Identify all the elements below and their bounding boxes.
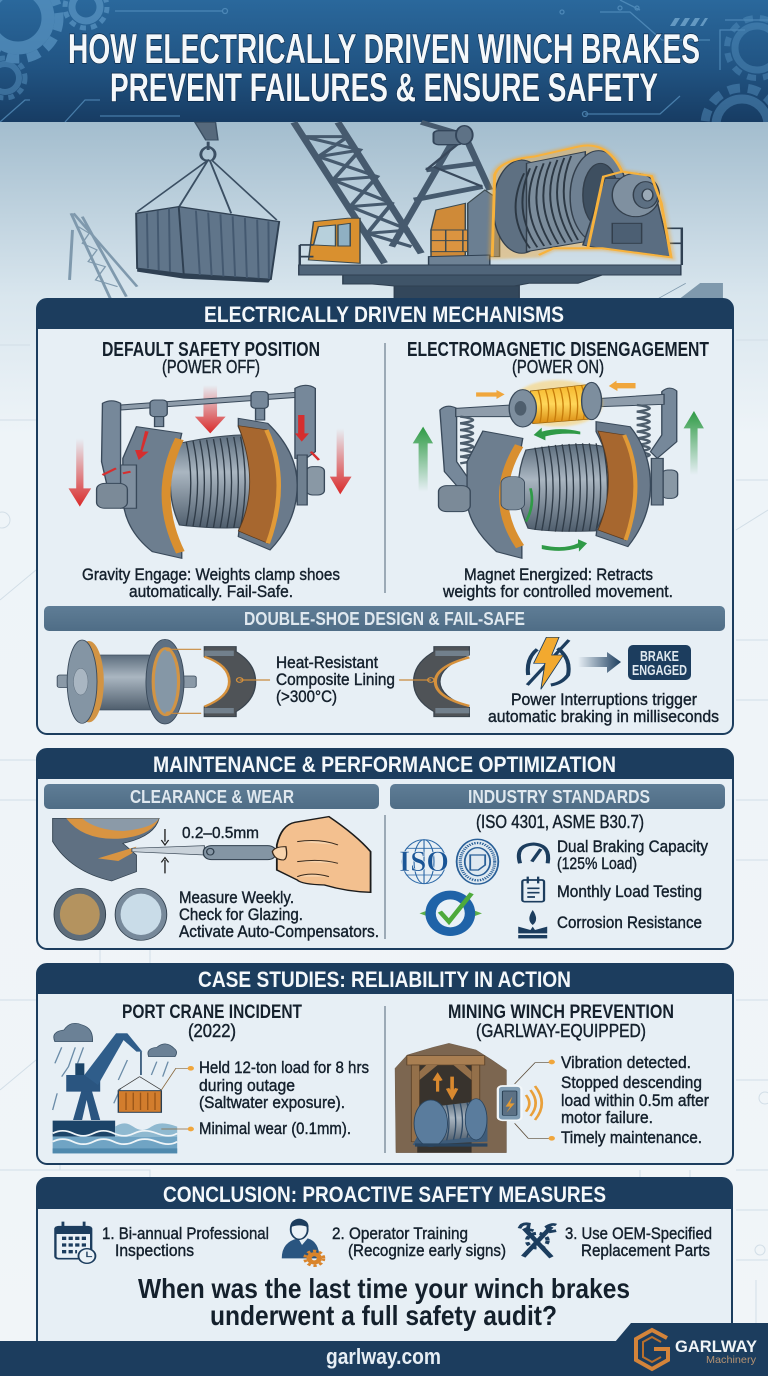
panel: conclusion <box>37 1178 732 1358</box>
sub-banner: industry standards: INDUSTRY STANDARDS <box>468 786 650 807</box>
measure 1: 1. Bi-annual Professional <box>102 1224 269 1243</box>
heading: ELECTRICALLY DRIVEN MECHANISMS <box>204 302 564 327</box>
caption: power interruptions: automatic braking in milliseconds <box>488 707 719 726</box>
hero: crane with highlighted winch <box>70 122 722 300</box>
panel: case studies <box>37 964 733 1164</box>
logo: GARLWAY <box>675 1337 758 1356</box>
illustration: brake engaged <box>68 385 352 558</box>
winch glow outline <box>492 145 671 257</box>
icon: ASME seal <box>457 839 498 884</box>
brake engaged badge <box>628 645 691 680</box>
footer <box>0 1323 768 1376</box>
logo <box>636 1330 758 1369</box>
mining winch results <box>561 1053 709 1147</box>
sub-banner: double-shoe design: DOUBLE-SHOE DESIGN & FAIL-SAFE <box>244 608 525 629</box>
title <box>68 25 700 110</box>
caption: power interruptions: Power Interruptions trigger <box>511 690 697 709</box>
subheading: default safety position: (POWER OFF) <box>162 357 260 377</box>
boom head pulley <box>433 126 473 145</box>
shipping container <box>136 207 279 283</box>
illustration: clearance measurement <box>53 817 371 940</box>
caption: gravity engage: automatically. Fail-Safe. <box>129 582 293 601</box>
caption: gravity engage <box>82 565 340 601</box>
winch orange highlight <box>492 145 671 257</box>
measure 1 <box>102 1224 269 1260</box>
port crane results: Held 12-ton load for 8 hrs <box>199 1058 369 1077</box>
sub-banner: industry standards <box>390 784 725 809</box>
subheading: default safety position: DEFAULT SAFETY POSITION <box>102 339 320 361</box>
subheading: port crane <box>122 1002 302 1041</box>
measure 2: (Recognize early signs) <box>348 1241 506 1260</box>
sub-banner: double-shoe design <box>44 606 725 631</box>
heat-resistant lining label <box>276 654 395 706</box>
subheading: mining winch <box>448 1002 674 1041</box>
caption: gravity engage: Gravity Engage: Weights clamp shoes <box>82 565 340 584</box>
heat-resistant lining label: (>300°C) <box>276 688 337 706</box>
panel: electrically driven mechanisms <box>37 299 733 734</box>
caption: power interruptions <box>488 690 719 726</box>
logo: Machinery <box>706 1355 756 1366</box>
maintenance instructions: Measure Weekly. <box>179 888 294 907</box>
measure 3: 3. Use OEM-Specified <box>565 1224 712 1243</box>
icon: gauge <box>519 844 548 863</box>
lattice boom <box>294 122 490 263</box>
subheading: electromagnetic disengagement <box>407 339 709 377</box>
brake engaged badge: ENGAGED <box>632 663 687 679</box>
closing question: When was the last time your winch brakes <box>138 1273 630 1304</box>
illustration: port crane in storm <box>53 1023 194 1153</box>
subheading: mining winch: (GARLWAY-EQUIPPED) <box>476 1021 646 1041</box>
heading: MAINTENANCE & PERFORMANCE OPTIMIZATION <box>153 752 616 777</box>
icon: certification seal <box>419 891 482 936</box>
standards reference: (ISO 4301, ASME B30.7) <box>476 812 644 832</box>
icon: water drop <box>518 910 547 938</box>
heat-resistant lining label: Composite Lining <box>276 671 395 689</box>
icon: power interruption <box>527 637 569 689</box>
port crane results: (Saltwater exposure). <box>199 1093 345 1112</box>
port crane results <box>199 1058 369 1138</box>
list: standards requirements: Monthly Load Testing <box>557 882 702 901</box>
icon: ISO globe: ISO <box>399 845 449 878</box>
list: standards requirements: (125% Load) <box>557 854 637 873</box>
icon: crossed tools <box>519 1224 556 1257</box>
port crane results: Minimal wear (0.1mm). <box>199 1119 351 1138</box>
subheading: mining winch: MINING WINCH PREVENTION <box>448 1002 674 1023</box>
website: garlway.com <box>326 1344 441 1369</box>
heat-resistant lining label: Heat-Resistant <box>276 654 378 672</box>
brake engaged badge: BRAKE <box>640 649 679 665</box>
orange cab and machinery <box>309 190 500 263</box>
measure 1: Inspections <box>115 1241 194 1260</box>
subheading: port crane: (2022) <box>188 1021 236 1041</box>
list: standards requirements <box>557 837 708 932</box>
hook and rigging <box>137 122 277 220</box>
mining winch results: motor failure. <box>561 1108 653 1127</box>
sub-banner: clearance and wear <box>44 784 379 809</box>
measure 3 <box>565 1224 712 1260</box>
panel: maintenance and performance <box>37 749 733 949</box>
illustration: mine shaft winch <box>395 1043 555 1153</box>
maintenance instructions: Activate Auto-Compensators. <box>179 922 379 941</box>
list: standards requirements: Corrosion Resistance <box>557 913 702 932</box>
deck platform <box>299 228 682 300</box>
caption: magnet energized <box>442 565 673 601</box>
maintenance instructions: Check for Glazing. <box>179 905 303 924</box>
gear decorations <box>0 0 768 122</box>
header banner <box>0 0 768 162</box>
mining winch results: Vibration detected. <box>561 1053 691 1072</box>
illustration: brake drum and shoes <box>57 639 469 724</box>
illustration: brake released <box>413 380 704 558</box>
measure 2: 2. Operator Training <box>332 1224 468 1243</box>
icon: operator with gear <box>282 1219 324 1266</box>
winch drum <box>493 151 671 257</box>
list: standards requirements: Dual Braking Capacity <box>557 837 708 856</box>
background cranes <box>70 213 722 298</box>
mining winch results: Stopped descending <box>561 1073 702 1092</box>
heading: CONCLUSION: PROACTIVE SAFETY MEASURES <box>163 1182 606 1207</box>
subheading: port crane: PORT CRANE INCIDENT <box>122 1002 302 1023</box>
heading: CASE STUDIES: RELIABILITY IN ACTION <box>198 967 571 992</box>
sub-banner: clearance and wear: CLEARANCE & WEAR <box>130 786 294 807</box>
closing question <box>138 1273 630 1331</box>
arrow <box>578 652 621 673</box>
maintenance instructions <box>179 888 379 941</box>
measure 2 <box>332 1224 506 1260</box>
icon: clipboard <box>522 877 544 902</box>
mining winch results: load within 0.5m after <box>561 1091 709 1110</box>
subheading: default safety position <box>102 339 320 377</box>
mining winch results: Timely maintenance. <box>561 1128 702 1147</box>
subheading: electromagnetic disengagement: (POWER ON) <box>512 357 604 377</box>
closing question: underwent a full safety audit? <box>210 1300 557 1331</box>
port crane results: during outage <box>199 1076 295 1095</box>
caption: magnet energized: Magnet Energized: Retracts <box>464 565 653 584</box>
caption: magnet energized: weights for controlled movement. <box>442 582 673 601</box>
icon: calendar <box>55 1222 95 1263</box>
measure 3: Replacement Parts <box>581 1241 710 1260</box>
clearance value: 0.2–0.5mm <box>182 825 259 842</box>
